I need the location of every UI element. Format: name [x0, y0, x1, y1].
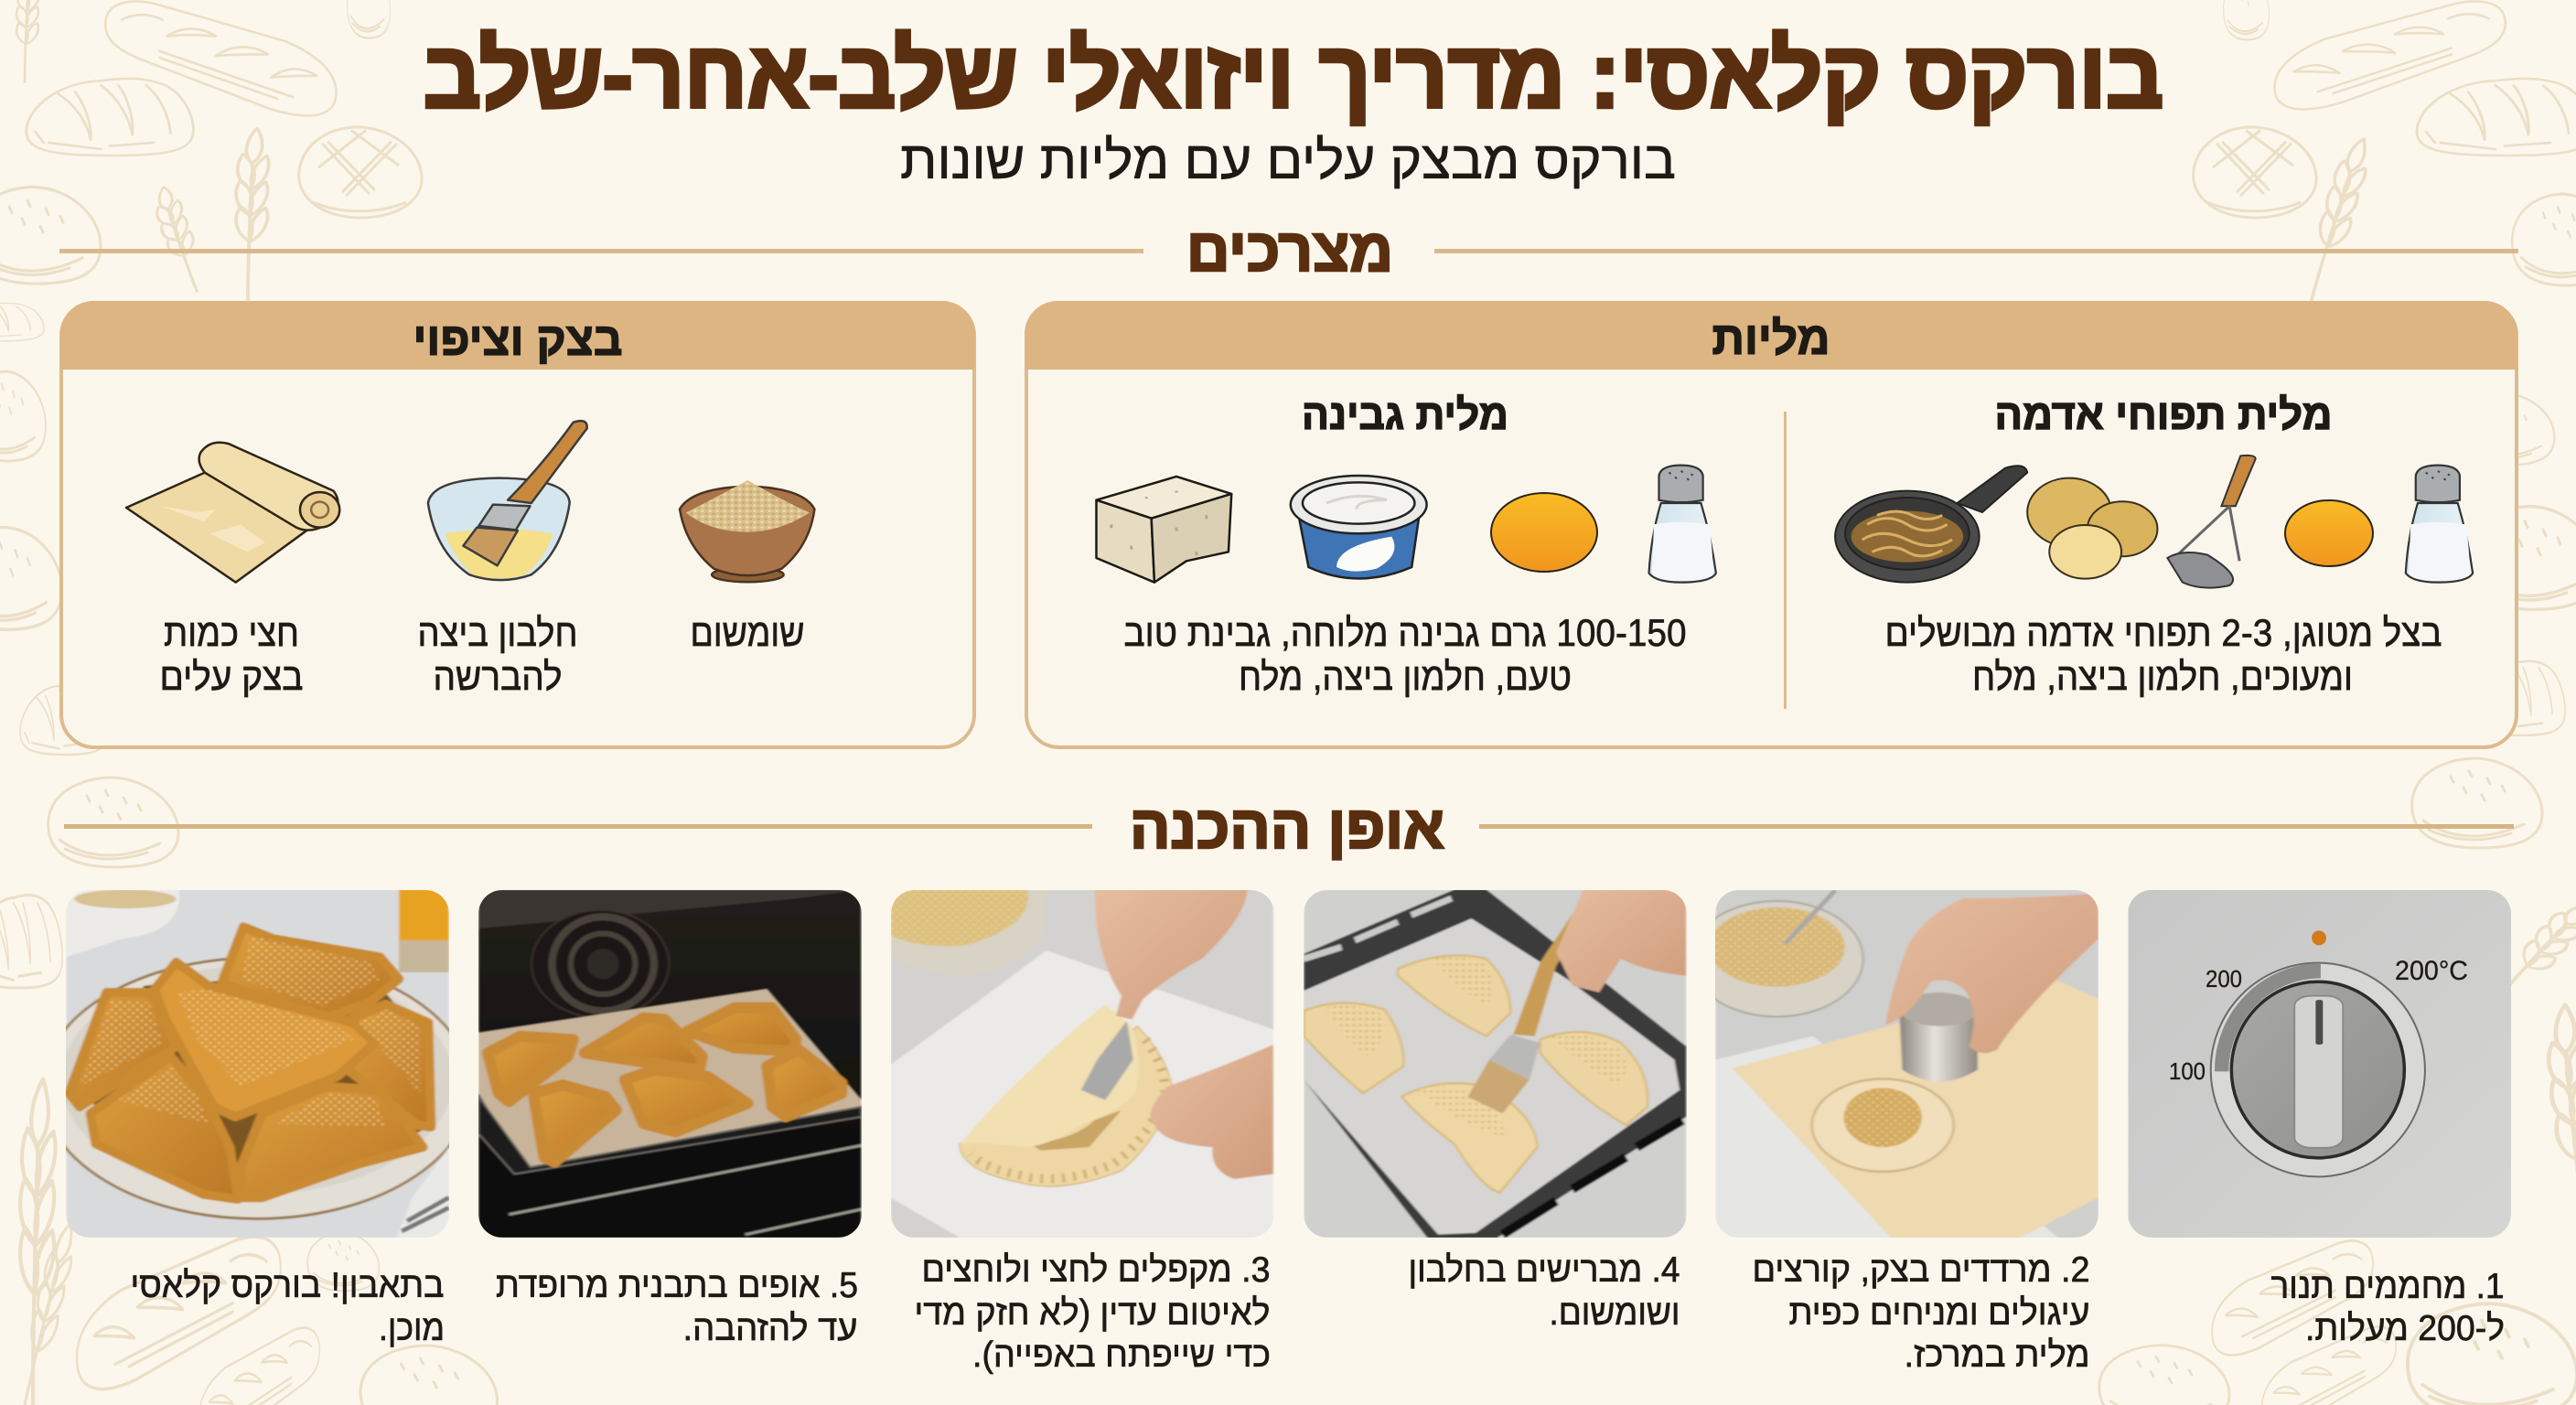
label: half a quantity of puff pastry: בצק עלים: [159, 655, 304, 698]
step 1: preheat oven: [2128, 889, 2511, 1348]
label: egg white for brushing: חלבון ביצה: [417, 611, 578, 654]
caption: step 4: ושומשום.: [1550, 1293, 1680, 1333]
photo: sealing folded dough with a fork: [890, 889, 1273, 1238]
caption: final step: [130, 1266, 445, 1348]
icon: tub of cream cheese: [1291, 476, 1427, 578]
icon: salt shaker: [2406, 466, 2473, 583]
label: egg white for brushing: [417, 611, 578, 698]
icon: egg yolk: [1491, 493, 1597, 572]
final step: serve: [66, 890, 449, 1347]
label: half a quantity of puff pastry: חצי כמות: [164, 611, 299, 654]
icon: potatoes: [2027, 478, 2157, 579]
caption: step 3: לאיטום עדין (לא חזק מדי: [915, 1293, 1270, 1333]
text: potato filling ingredients: בצל מטוגן, 2-3 תפוחי אדמה מבושלים: [1884, 611, 2442, 654]
caption: step 2: מלית במרכז.: [1905, 1335, 2089, 1375]
icon: potato masher: [2167, 456, 2256, 588]
caption: step 2: עיגולים ומניחים כפית: [1789, 1293, 2089, 1333]
caption: step 3: [915, 1250, 1271, 1375]
caption: step 5: [496, 1266, 858, 1348]
label: egg white for brushing: להברשה: [434, 655, 562, 698]
caption: final step: מוכן.: [379, 1309, 445, 1348]
caption: step 2: 2. מרדדים בצק, קורצים: [1753, 1250, 2089, 1290]
divider between fillings: [1784, 412, 1787, 709]
heading: fillings: מליות: [1712, 313, 1830, 364]
section heading: preparation: [64, 793, 2514, 861]
icon: salt shaker: [1649, 466, 1716, 583]
text: cheese filling ingredients: טעם, חלמון ביצה, מלח: [1239, 655, 1572, 698]
photo: brushing pastries on a tray: [1304, 889, 1686, 1238]
caption: step 3: כדי שייפתח באפייה).: [972, 1335, 1271, 1375]
caption: step 1: 1. מחממים תנור: [2270, 1267, 2505, 1306]
photo: oven dial at 200 degrees: 200: [2206, 965, 2242, 992]
label: half a quantity of puff pastry: [159, 611, 304, 698]
caption: step 4: 4. מברישים בחלבון: [1409, 1250, 1680, 1290]
step 2: roll and cut dough: [1690, 889, 2098, 1375]
photo: oven dial at 200 degrees: 200°C: [2395, 956, 2468, 986]
step 3: fold and seal: [890, 889, 1273, 1375]
icon: bowl of sesame seeds: [680, 480, 814, 582]
label: sesame: שומשום: [690, 611, 805, 654]
caption: final step: בתאבון! בורקס קלאסי: [130, 1266, 445, 1305]
photo: pastries baking in an oven: [478, 889, 861, 1238]
heading: dough and coating: בצק וציפוי: [413, 314, 622, 365]
text: potato filling ingredients: [1884, 611, 2442, 698]
icon: frying pan with onions: [1835, 466, 2027, 583]
caption: step 5: עד להזהבה.: [682, 1309, 858, 1348]
caption: step 3: 3. מקפלים לחצי ולוחצים: [922, 1250, 1270, 1290]
section heading: preparation: אופן ההכנה: [1130, 793, 1444, 861]
caption: step 5: 5. אופים בתבנית מרופדת: [496, 1266, 858, 1305]
icon: block of salty cheese: [1096, 477, 1231, 583]
subtitle: בורקס מבצק עלים עם מליות שונות: [900, 131, 1676, 190]
photo: finished bourekas on a plate: [66, 890, 449, 1238]
panel: dough and coating: [60, 301, 975, 747]
icon: glass bowl with egg white and brush: [428, 421, 587, 580]
panel header: dough and coating: [60, 301, 975, 370]
text: cheese filling ingredients: 100-150 גרם גבינה מלוחה, גבינת טוב: [1123, 611, 1687, 654]
text: potato filling ingredients: ומעוכים, חלמון ביצה, מלח: [1972, 655, 2353, 698]
caption: step 1: ל-200 מעלות.: [2305, 1309, 2505, 1348]
title: בורקס קלאסי: מדריך ויזואלי שלב-אחר-שלב: [424, 23, 2163, 127]
panel: fillings: [1025, 301, 2517, 747]
column: potato filling: [1835, 391, 2473, 698]
heading: potato filling: מלית תפוחי אדמה: [1994, 391, 2333, 438]
caption: step 2: [1753, 1250, 2089, 1375]
caption: step 4: [1409, 1250, 1680, 1333]
photo: oven dial at 200 degrees: 100: [2169, 1057, 2206, 1085]
text: cheese filling ingredients: [1123, 611, 1687, 698]
section heading: ingredients: [59, 216, 2518, 284]
step 5: bake: [478, 889, 861, 1348]
photo: oven dial at 200 degrees: [2128, 889, 2511, 1238]
panel header: fillings: [1025, 301, 2517, 370]
column: cheese filling: [1096, 391, 1716, 698]
section heading: ingredients: מצרכים: [1186, 216, 1393, 284]
heading: cheese filling: מלית גבינה: [1302, 391, 1508, 438]
photo: cutting dough circles: [1690, 889, 2098, 1238]
icon: egg yolk: [2285, 500, 2373, 566]
icon: rolled puff pastry sheet: [126, 443, 339, 583]
step 4: brush with egg white and sesame: [1304, 889, 1686, 1333]
caption: step 1: [2270, 1267, 2505, 1348]
icons and labels: dough and coating: [126, 421, 814, 698]
